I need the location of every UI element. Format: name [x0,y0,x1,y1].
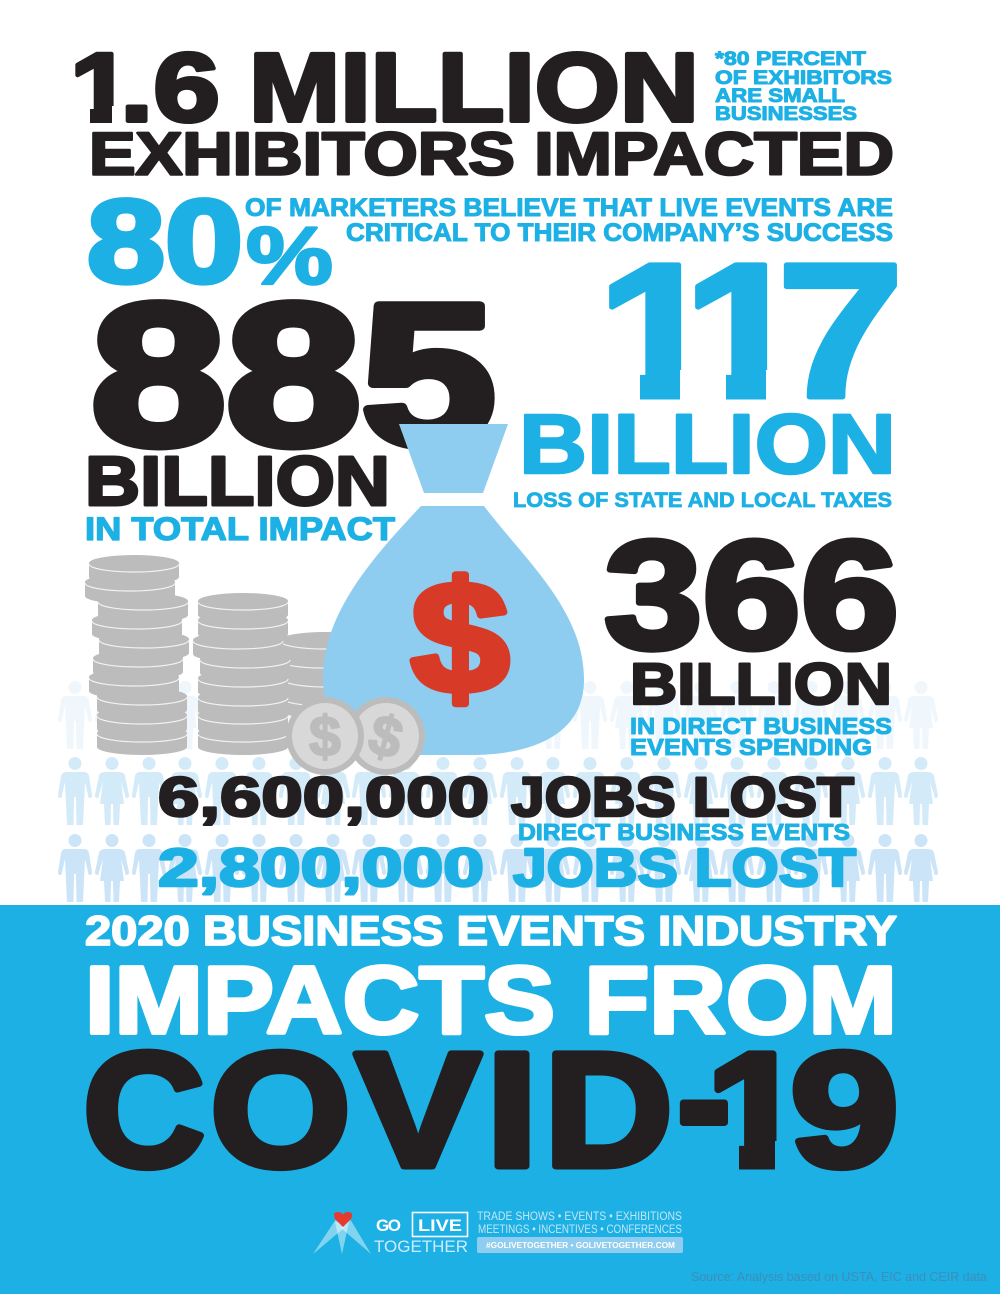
stat: 117 [609,262,897,400]
text: marketers believe: OF MARKETERS BELIEVE THAT LIVE EVENTS ARE [245,194,893,222]
stat: 117: 1 [597,223,719,438]
title line: covid-19: D [544,1018,673,1201]
icon: money bag [323,424,584,755]
logo: go live together: MEETINGS • INCENTIVES • CONFERENCES [478,1224,682,1236]
heading: 1.6 million: .6 [120,33,220,142]
logo: go live together [313,1211,683,1256]
caption: direct business events spending: IN DIRECT BUSINESS [630,713,892,739]
caption: direct business events: DIRECT BUSINESS EVENTS [518,819,850,845]
caption: direct business events spending [630,713,892,760]
title line: covid-19: C [83,1018,205,1201]
panel: title banner [0,905,1000,1294]
text: marketers believe: CRITICAL TO THEIR COMPANY’S SUCCESS [346,219,893,247]
title line: covid-19 [86,1048,896,1172]
stat: 885: 885 [91,262,496,487]
stat: 6,600,000 jobs lost: 6,600,000 [158,765,489,828]
caption: in total impact: IN TOTAL IMPACT [85,511,396,547]
title line: 2020 business events industry: 2020 BUSINESS EVENTS INDUSTRY [85,907,897,954]
source note: Source: Analysis based on USTA, EIC and CEIR data [691,1269,988,1284]
people rows pictogram [58,605,938,902]
stat: 6,600,000 jobs lost [158,765,854,828]
icon: silver dollar coins: $ [362,702,409,772]
note: small businesses: *80 PERCENT [715,48,866,70]
logo: go live together: GO [376,1216,401,1235]
note: small businesses [715,48,892,125]
title line: covid-19: - [677,1007,731,1190]
stat: 2,800,000 jobs lost: 2,800,000 [158,838,484,898]
title line: covid-19: 1 [706,1018,806,1201]
heading: 1.6 million: 1 [70,33,132,142]
title line: covid-19: O [210,1018,351,1201]
icon: silver dollar coins [286,697,425,775]
stat: 80 percent [87,176,333,308]
text: marketers believe [245,194,893,247]
heading: 1.6 million [75,50,694,124]
stat: 2,800,000 jobs lost [158,838,856,898]
logo: go live together: TRADE SHOWS • EVENTS • EXHIBITIONS [477,1211,682,1223]
icon: red dollar sign: $ [411,550,509,726]
icon: silver dollar coins: $ [309,705,341,769]
heading: 1.6 million: MILLION [249,33,699,142]
stat: 80 percent: 80 [87,176,243,308]
stat: 117 billion label: BILLION [519,397,896,491]
heading: exhibitors impacted: EXHIBITORS IMPACTED [89,120,894,188]
logo: go live together: TOGETHER [374,1237,468,1256]
title line: covid-19: I [486,1018,538,1201]
stat: 117: 1 [683,223,805,438]
stat: 2,800,000 jobs lost: JOBS LOST [513,838,856,898]
title line: covid-19: V [355,1018,481,1201]
caption: loss of taxes: LOSS OF STATE AND LOCAL TAXES [513,489,892,512]
logo: go live together: #GOLIVETOGETHER • GOLIVETOGETHER.COM [486,1240,675,1250]
stat: 366 billion label: BILLION [630,652,892,717]
stat: 885 billion label: BILLION [85,442,390,520]
stat: 117: 7 [777,223,904,438]
note: small businesses: ARE SMALL [715,85,845,107]
caption: direct business events spending: EVENTS SPENDING [630,734,872,760]
stat: 6,600,000 jobs lost: JOBS LOST [511,765,854,828]
logo: go live together: LIVE [418,1216,462,1235]
stat: 366: 366 [604,509,899,681]
note: small businesses: BUSINESSES [715,103,857,125]
title line: covid-19: 9 [790,1018,899,1201]
title line: impacts from: IMPACTS FROM [85,947,897,1054]
coin stacks [85,555,372,755]
note: small businesses: OF EXHIBITORS [715,67,892,89]
stat: 80 percent: % [246,211,333,302]
